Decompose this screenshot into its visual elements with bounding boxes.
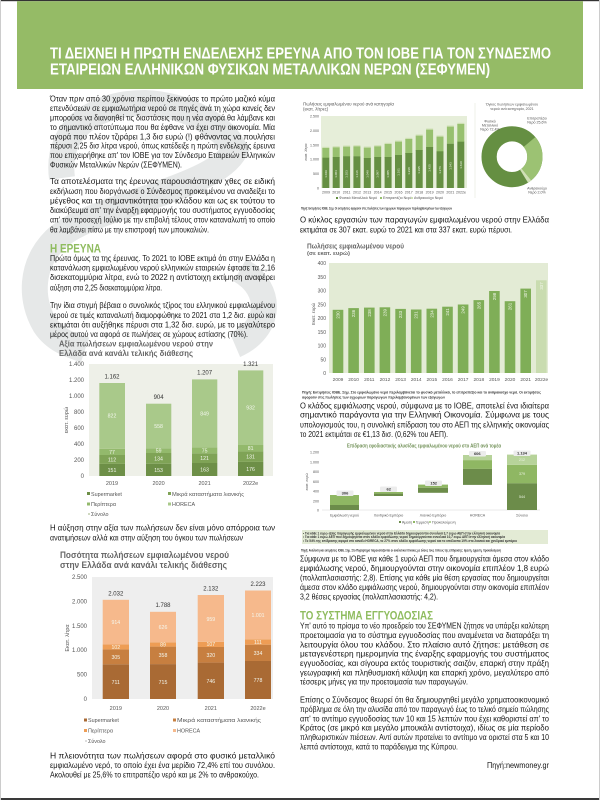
chart title: sales by category: Πωλήσεις εμφιαλωμένου νερού ανά κατηγορία — [303, 102, 394, 106]
intro paragraph: επενδύσεων σε εμφιαλωτήρια νερού σε πηγές ανά τη χώρα κανείς δεν — [50, 103, 275, 113]
legend: sales value: Supermarket — [91, 492, 122, 498]
stacked bar chart: sales value by channel: 121 — [200, 456, 209, 462]
stacked bar chart: sales value by channel: 1.162 — [104, 374, 120, 380]
second paragraph: διακύβευμα απ' την έναρξη εφαρμογής του συστήματος εγγυοδοσίας — [50, 205, 275, 215]
legend: sales volume: Μικρά καταστήματα λιανικής — [177, 717, 261, 724]
bar chart: producers sales 2009-2022: 2016 — [442, 377, 453, 383]
intro paragraph — [49, 94, 275, 170]
heading: Η ΕΡΕΥΝΑ: Η ΕΡΕΥΝΑ — [50, 242, 101, 256]
legend: sales by category: Φυσικό Μεταλλικό Νερό — [339, 196, 377, 200]
legend: sales value: HORECA — [172, 502, 195, 508]
turnover paragraph: Την ίδια στιγμή βέβαια ο συνολικός τζίρος του ελληνικού εμφιαλωμένου — [50, 300, 275, 310]
text: multipliers — [300, 554, 549, 602]
stacked bar chart: sales by category 2009-2022: 1.000 — [310, 158, 319, 162]
bar chart: producers sales 2009-2022: 231 — [414, 311, 419, 319]
donut chart: share by category 2021: Επιτραπέζιο — [527, 116, 547, 120]
stacked bar chart: sales value by channel — [63, 362, 273, 518]
bar chart: producers sales 2009-2022: 2018 — [473, 377, 484, 383]
turnover paragraph: μέρος αυτού να αφορά σε πωλήσεις σε χώρους εστίασης (70%). — [50, 329, 248, 339]
stacked bar chart: sales volume by channel: 111 — [254, 640, 262, 646]
research paragraph — [50, 253, 275, 292]
stacked bar chart: sales volume by channel: 2.132 — [203, 586, 219, 592]
waterfall chart: GDP impact by sector — [305, 444, 540, 524]
stacked bar chart: sales volume by channel: 107 — [206, 642, 215, 648]
text: multipliers: 3,2 θέσεις εργασίας (πολλαπλασιαστής: 4,2). — [300, 592, 438, 602]
legend: sales value: Σύνολο — [91, 512, 108, 518]
stacked bar chart: sales by category 2009-2022: 1.087 — [376, 170, 380, 178]
donut chart: share by category 2021: Φυσικό — [484, 120, 496, 124]
stacked bar chart: sales volume by channel: 1.500 — [72, 624, 88, 630]
source note: sales by category: Πηγή: Εκτιμήσεις ΙΟΒΕ. Σημ. Οι εκτιμήσεις αφορούν στις πωλήσεις των εγχώριων παραγωγών περιλαμβανομένων των εξαγωγών — [301, 206, 452, 210]
stacked bar chart: sales value by channel: 2022e — [243, 481, 258, 487]
donut chart: share by category 2021: Ανθρακούχο — [527, 186, 547, 190]
waterfall chart: GDP impact by sector: 212 — [519, 458, 525, 462]
legend: sales value: Περίπτερα — [91, 502, 116, 508]
waterfall chart: GDP impact by sector: 600 — [313, 480, 319, 484]
waterfall chart: GDP impact by sector: Επίδραση εφοδιαστικής αλυσίδας εμφιαλωμένου νερού στο ΑΕΠ ανά τομέα — [347, 444, 502, 450]
chart title: producers sales — [307, 242, 404, 257]
stacked bar chart: sales by category 2009-2022: 2022e — [456, 190, 466, 194]
text: financial problem: πρόβλημα σε όλη την αλυσίδα από τον παραγωγό έως το τελικό σημείο πώλησης — [300, 704, 549, 714]
stacked bar chart: sales volume by channel: 1.788 — [155, 603, 171, 609]
stacked bar chart: sales volume by channel: 746 — [206, 679, 215, 685]
bar chart: producers sales 2009-2022: 2021 — [520, 377, 531, 383]
stacked bar chart: sales by category 2009-2022 — [304, 114, 467, 200]
stacked bar chart: sales volume by channel: 2.032 — [108, 592, 124, 598]
stacked bar chart: sales value by channel: 932 — [246, 406, 255, 412]
turnover paragraph — [50, 300, 275, 339]
stacked bar chart: sales volume by channel: 334 — [254, 651, 262, 657]
header banner with title: ΕΤΑΙΡΕΙΩΝ ΕΛΛΗΝΙΚΩΝ ΦΥΣΙΚΩΝ ΜΕΤΑΛΛΙΚΩΝ ΝΕΡΩΝ (ΣΕΦΥΜΕΝ) — [50, 62, 490, 78]
stacked bar chart: sales by category 2009-2022: 1.116 — [355, 170, 359, 178]
text: bottling sector importance — [300, 400, 549, 439]
source note: GDP impact: Πηγή: Ανάλυση και εκτιμήσεις ΙΟΒΕ. Σημ. Στο Παράρτημα παρουσιάζονται οι αναλυτικοί πίνακες με όλους τους τύπους της επίδρασης: άμεση, έμμεση, προκαλούμενη — [301, 548, 501, 552]
donut chart: share by category 2021: Νερό 72,4% — [480, 128, 501, 132]
text: bottling sector importance: σημαντικό παράγοντα για την Ελληνική Οικονομία. Σύμφωνα με τους — [300, 410, 549, 420]
stacked bar chart: sales value by channel: 1.207 — [197, 370, 213, 376]
text: multipliers: άμεσα στον κλάδο εμφιάλωσης νερού, δημιουργούνται στην οικονομία επιπλέον — [300, 582, 549, 592]
stacked bar chart: sales by category 2009-2022: 2013 — [363, 190, 371, 194]
waterfall chart: GDP impact by sector: 1.200 — [310, 450, 319, 454]
research paragraph: αύξηση στα 2,25 δισεκατομμύρια λίτρα. — [50, 282, 162, 292]
legend: sales by category — [336, 196, 443, 200]
text: deposit system: εγγυοδοσίας, και σίγουρα εκτός τουριστικής σαιζόν, επαρκή στην πράξη — [300, 658, 549, 668]
stacked bar chart: sales value by channel: 1.400 — [69, 362, 85, 368]
stacked bar chart: sales volume by channel: 2020 — [157, 706, 169, 712]
stacked bar chart: sales value by channel: 904 — [154, 395, 164, 401]
legend: GDP impact: Έμμεση — [415, 520, 429, 524]
waterfall chart: GDP impact by sector: 1.134 — [517, 451, 528, 456]
waterfall chart: GDP impact by sector: 544 — [519, 495, 525, 499]
donut chart: share by category 2021: Μεταλλικό — [482, 124, 498, 128]
bar chart: producers sales 2009-2022: 233 — [398, 310, 403, 318]
text: bottling sector importance: υπολογισμούς του, η συνολική επίδραση του στο ΑΕΠ της ελληνικής οικονομίας — [300, 419, 549, 429]
stacked bar chart: sales volume by channel: 2.000 — [72, 599, 88, 605]
stacked bar chart: sales value by channel: 153 — [154, 468, 163, 474]
stacked bar chart: sales volume by channel: 959 — [206, 617, 215, 623]
waterfall chart: GDP impact by sector: 62 — [386, 487, 392, 492]
stacked bar chart: sales by category 2009-2022: 1.276 — [438, 166, 442, 174]
bar chart: producers sales 2009-2022: 2012 — [380, 377, 391, 383]
text: deposit system: λειτουργία όλου του κλάδου. Στο πλαίσιο αυτό ζήτησε: μετάθεση σε — [300, 640, 549, 650]
bar chart: producers sales 2009-2022: 307 — [523, 290, 528, 298]
chart title: sales value: Αξία πωλήσεων εμφιαλωμένου νερού στην — [59, 338, 213, 348]
donut chart: share by category 2021: Νερό 2,0% — [528, 190, 547, 194]
bar chart: producers sales 2009-2022: 2017 — [458, 377, 469, 383]
waterfall chart: GDP impact by sector: 152 — [430, 481, 438, 486]
bar chart: producers sales 2009-2022: 400 — [318, 261, 326, 267]
bar chart: producers sales 2009-2022: 337 — [539, 282, 544, 290]
intro paragraph: αγορά που πλέον τζιράρει 1,3 δισ ευρώ (!) φθάνοντας να πουλήσει — [50, 131, 275, 141]
text: multipliers: εμφιάλωσης νερού, δημιουργούνται στην οικονομία επιπλέον 1,8 ευρώ — [300, 563, 549, 573]
turnover paragraph: νερού σε τιμές καταναλωτή διαμορφώθηκε το 2021 στα 1,2 δισ. ευρώ και — [50, 310, 275, 320]
donut chart: share by category 2021: νερού ανά κατηγορία, 2021 — [490, 107, 534, 111]
stacked bar chart: sales value by channel: 600 — [74, 426, 85, 432]
legend: sales volume: HORECA — [177, 728, 200, 734]
legend: sales value — [87, 491, 244, 518]
stacked bar chart: sales volume by channel: 500 — [77, 673, 88, 679]
bar chart: producers sales 2009-2022: 236 — [351, 309, 356, 317]
stacked bar chart: sales value by channel: 1.000 — [69, 394, 85, 400]
chart title: producers sales: (σε εκατ. ευρώ) — [307, 251, 350, 257]
stacked bar chart: sales value by channel: 77 — [109, 450, 115, 456]
intro paragraph: Όταν πριν από 30 χρόνια περίπου ξεκινούσε το πρώτο μαζικό κύμα — [49, 94, 275, 104]
donut chart: share by category 2021 — [475, 102, 548, 198]
bar chart: producers sales 2009-2022: 150 — [318, 330, 326, 336]
research paragraph: δισεκατομμύρια λίτρα, ενώ το 2022 η αντίστοιχη εκτίμηση αναφέρει — [50, 272, 275, 282]
stacked bar chart: sales by category 2009-2022: 1.610 — [459, 161, 463, 169]
text: financial problem: Επίσης ο Σύνδεσμος θεωρεί ότι θα δημιουργηθεί μεγάλο χρηματοοικονομικό — [300, 694, 549, 704]
bar chart: producers sales 2009-2022: 0 — [323, 371, 326, 377]
stacked bar chart: sales by category 2009-2022: 2017 — [405, 190, 413, 194]
stacked bar chart: sales value by channel: 176 — [246, 467, 255, 473]
text: financial problem: απ' το αντίτιμο εγγυοδοσίας των 10 και 15 λεπτών που έχει καθοριστεί απ' το — [300, 714, 549, 724]
stacked bar chart: sales by category 2009-2022: 2011 — [343, 190, 350, 194]
bar chart: producers sales 2009-2022: 2010 — [348, 377, 359, 383]
legend: GDP impact: Προκαλούμενη — [432, 520, 456, 524]
stacked bar chart: sales volume by channel: 320 — [206, 653, 215, 659]
text: producers turnover: εκτιμάται σε 307 εκατ. ευρώ το 2021 και στα 337 εκατ. ευρώ πέρυσι. — [300, 224, 512, 234]
bar chart: producers sales 2009-2022: 100 — [318, 344, 326, 350]
waterfall chart: GDP impact by sector: 800 — [313, 470, 319, 474]
chart title: sales by category — [303, 102, 394, 112]
text: deposit system — [300, 620, 549, 687]
text: financial problem — [300, 694, 549, 752]
text: deposit system: μεταγενέστερη ημερομηνία της έναρξης εφαρμογής του συστήματος — [300, 648, 549, 658]
text: multipliers: (πολλαπλασιαστής: 2,8). Επίσης για κάθε μία θέση εργασίας που δημιουργείται — [300, 572, 549, 582]
stacked bar chart: sales by category 2009-2022: 2.000 — [310, 129, 319, 133]
text: financial problem: πληθωριστικών πιέσεων. Αντί αυτών προτείνει το αντίτιμο να οριστεί στα 5 και 10 — [300, 732, 549, 742]
bar chart: producers sales 2009-2022: 300 — [318, 288, 326, 294]
chart title: sales value: Ελλάδα ανά κανάλι τελικής διάθεσης — [59, 348, 193, 358]
stacked bar chart: sales by category 2009-2022: 1.103 — [345, 170, 349, 178]
chart title: sales by category: (εκατ. λίτρες) — [303, 106, 329, 112]
stacked bar chart: sales value by channel: 800 — [74, 410, 85, 416]
waterfall chart: GDP impact by sector: 606 — [474, 451, 481, 456]
waterfall chart: GDP impact by sector: 379 — [519, 472, 525, 476]
stacked bar chart: sales by category 2009-2022: 2019 — [426, 190, 434, 194]
bar chart: producers sales 2009-2022: 298 — [492, 292, 497, 300]
stacked bar chart: sales value by channel: 849 — [200, 412, 209, 418]
legend: sales by category: Επιτραπέζιο Νερό — [383, 196, 412, 200]
stacked bar chart: sales value by channel: 131 — [246, 454, 255, 460]
waterfall chart: GDP impact by sector: εκατ. ευρώ — [305, 473, 309, 490]
waterfall chart: GDP impact by sector: 200 — [313, 499, 319, 503]
bar chart: producers sales 2009-2022: 265 — [476, 301, 481, 309]
text: multipliers: Σύμφωνα με το ΙΟΒΕ για κάθε 1 ευρώ ΑΕΠ που δημιουργείται άμεσα στον κλάδο — [300, 554, 549, 564]
stacked bar chart: sales by category 2009-2022: 1.500 — [310, 143, 319, 147]
stacked bar chart: sales by category 2009-2022: εκατ. λίτρα — [304, 144, 308, 160]
stacked bar chart: sales volume by channel: 914 — [111, 620, 120, 626]
stacked bar chart: sales by category 2009-2022: 2010 — [332, 190, 340, 194]
text: deposit system: τέσσερις μήνες για την προετοιμασία των παραγωγών. — [300, 677, 468, 687]
stacked bar chart: sales value by channel: 134 — [154, 456, 163, 462]
header banner with title — [17, 1, 583, 89]
intro paragraph: το σημαντικό αποτύπωμα που θα έφθανε να έχει στην οικονομία. Μία — [50, 122, 275, 132]
stacked bar chart: sales by category 2009-2022: 1.543 — [448, 162, 452, 170]
bar chart: producers sales 2009-2022: Εκατ. ευρώ — [311, 302, 316, 325]
stacked bar chart: sales volume by channel: 89 — [160, 642, 166, 648]
bar chart: producers sales 2009-2022: 249 — [461, 306, 466, 314]
stacked bar chart: sales value by channel: 400 — [74, 442, 85, 448]
stacked bar chart: sales volume by channel: 305 — [111, 655, 120, 661]
stacked bar chart: sales value by channel: 81 — [248, 446, 254, 452]
stacked bar chart: sales by category 2009-2022: 2.500 — [310, 114, 319, 118]
waterfall chart: GDP impact by sector: 306 — [342, 491, 349, 496]
stacked bar chart: sales by category 2009-2022: 1.049 — [365, 170, 369, 178]
second paragraph: Τα αποτελέσματα της έρευνας παρουσιάστηκαν χθες σε ειδική — [50, 176, 275, 186]
legend: sales volume: Supermarket — [88, 718, 119, 724]
stacked bar chart: sales volume by channel: 358 — [159, 653, 167, 659]
stacked bar chart: sales value by channel: 200 — [74, 458, 85, 464]
stacked bar chart: sales volume by channel: 778 — [254, 678, 262, 684]
bar chart: producers sales 2009-2022: 2015 — [426, 377, 437, 383]
heading: ΤΟ ΣΥΣΤΗΜΑ ΕΓΓΥΟΔΟΣΙΑΣ: ΤΟ ΣΥΣΤΗΜΑ ΕΓΓΥΟΔΟΣΙΑΣ — [300, 608, 433, 622]
bar chart: producers sales 2009-2022: 50 — [320, 357, 326, 363]
legend: GDP impact — [399, 520, 456, 524]
source note: producers sales — [302, 390, 541, 399]
intro paragraph: Φυσικών Μεταλλικών Νερών (ΣΕΦΥΜΕΝ). — [50, 160, 182, 170]
waterfall chart: GDP impact by sector: Χονδρικό Εμπόριο — [374, 514, 403, 518]
source note: producers sales: Πηγή: Εκτιμήσεις ΙΟΒΕ. Σημ. Στο εμφιαλωμένο νερό περιλαμβάνεται το φυσικό μεταλλικό, το επιτραπέζιο και το ανθρακούχο νερό. Οι εκτιμήσεις — [302, 390, 541, 394]
stacked bar chart: sales volume by channel: 2.500 — [72, 575, 88, 581]
callout box: multipliers: • Για κάθε 1 ευρώ ΑΕΠ που δημιουργείται στον κλάδο εμφιάλωσης νερού δημιουργούνται συνολικά 10,7 ευρώ ΑΕΠ στην ελληνική οικονομία — [303, 535, 506, 539]
stacked bar chart: sales value by channel: 59 — [156, 448, 162, 454]
text: financial problem: λεπτά αντίστοιχα, κατά το παράδειγμα της Κύπρου. — [300, 742, 458, 752]
waterfall chart: GDP impact by sector: 400 — [313, 490, 319, 494]
chart title: sales value — [59, 338, 213, 358]
second paragraph: εκδήλωση που διοργάνωσε ο Σύνδεσμος προκειμένου να αναδείξει το — [50, 186, 275, 196]
stacked bar chart: sales by category 2009-2022: 1.084 — [334, 170, 338, 178]
bar chart: producers sales 2009-2022: 2009 — [333, 377, 344, 383]
stacked bar chart: sales volume by channel: 1.001 — [252, 613, 265, 619]
callout box: multipliers: • Για κάθε 1 ευρώ αξίας παραγωγής εμφιαλωμένου νερού στην Ελλάδα δημιουργούνται συνολικά 3,7 ευρώ ΑΕΠ στην ελληνική οικονομία — [303, 531, 501, 535]
legend: sales volume — [84, 717, 261, 745]
callout box: multipliers: • Το 54% της επίδρασης αφορά στο κανάλι HORECA, το 27% στον κλάδο εμφιάλωσης νερού και το υπόλοιπο 19% στο λιανικό και χονδρικό εμπόριο — [303, 539, 517, 543]
bar chart: producers sales 2009-2022: 2013 — [395, 377, 406, 383]
text: producers turnover — [300, 214, 549, 234]
stacked bar chart: sales by category 2009-2022: 2014 — [374, 190, 382, 194]
stacked bar chart: sales by category 2009-2022: 1.085 — [386, 170, 390, 178]
waterfall chart: GDP impact by sector: Σύνολο — [516, 514, 528, 518]
stacked bar chart: sales value by channel: 1.200 — [69, 378, 85, 384]
text: water type shares: Η πλειονότητα των πωλήσεων αφορά στο φυσικό μεταλλικό — [50, 750, 275, 760]
bar chart: producers sales 2009-2022: 2019 — [489, 377, 500, 383]
stacked bar chart: sales volume by channel: 2019 — [110, 706, 122, 712]
stacked bar chart: sales value by channel: 2020 — [152, 481, 165, 487]
legend: sales value: Μικρά καταστήματα λιανικής — [172, 491, 244, 498]
intro paragraph: πέρυσι 2,25 δισ λίτρα νερού, όπως κατέδειξε η πρώτη ενδελεχής έρευνα — [50, 141, 275, 151]
bar chart: producers sales 2009-2022: 2011 — [364, 377, 375, 383]
stacked bar chart: sales value by channel: 2019 — [106, 481, 118, 487]
chart title: producers sales: Πωλήσεις εμφιαλωμένου νερού — [307, 242, 404, 250]
stacked bar chart: sales by category 2009-2022: 2016 — [394, 190, 402, 194]
stacked bar chart: sales by category 2009-2022: 1.335 — [417, 166, 421, 174]
stacked bar chart: sales volume by channel — [65, 575, 273, 745]
intro paragraph: που επιχειρήθηκε απ' τον ΙΟΒΕ για τον Σύνδεσμο Εταιρειών Ελληνικών — [50, 150, 275, 160]
donut chart: share by category 2021: Όγκος πωλήσεων εμφιαλωμένου — [485, 102, 538, 106]
stacked bar chart: sales volume by channel: 102 — [111, 645, 120, 651]
stacked bar chart: sales volume by channel: 2022e — [250, 706, 266, 712]
bar chart: producers sales 2009-2022: 230 — [336, 311, 340, 319]
bar chart: producers sales 2009-2022: 2022e — [535, 377, 548, 383]
stacked bar chart: sales by category 2009-2022: 500 — [313, 172, 319, 176]
text: value growth note: Η αύξηση στην αξία των πωλήσεων δεν είναι μόνο απόρροια των — [50, 522, 275, 532]
stacked bar chart: sales by category 2009-2022: 1.049 — [324, 170, 328, 178]
stacked bar chart: sales volume by channel: 2.223 — [250, 582, 266, 588]
stacked bar chart: sales value by channel: 822 — [108, 414, 116, 420]
research paragraph: Πρώτα όμως τα της έρευνας. Το 2021 το ΙΟΒΕ εκτιμά ότι στην Ελλάδα η — [50, 253, 275, 263]
waterfall chart: GDP impact by sector: Λιανικό Εμπόριο — [420, 514, 446, 518]
donut chart: share by category 2021: Νερό 25,6% — [527, 120, 548, 124]
bar chart: producers sales 2009-2022: 2020 — [505, 377, 516, 383]
stacked bar chart: sales by category 2009-2022: 2015 — [384, 190, 392, 194]
waterfall chart: GDP impact by sector: HORECA — [470, 514, 486, 518]
legend: sales by category: Ανθρακούχο Νερό — [414, 196, 443, 200]
bar chart: producers sales 2009-2022: 350 — [318, 275, 326, 281]
bar chart: producers sales 2009-2022: 239 — [382, 308, 387, 316]
waterfall chart: GDP impact by sector: Εμφιάλωση νερού — [330, 514, 359, 518]
stacked bar chart: sales volume by channel: 711 — [112, 680, 120, 686]
stacked bar chart: sales value by channel: 75 — [202, 448, 208, 454]
source note: producers sales: αφορούν στις πωλήσεις των εγχώριων παραγωγών περιλαμβανομένων των εξαγωγών — [302, 395, 445, 399]
bar chart: producers sales 2009-2022: 261 — [508, 302, 512, 310]
stacked bar chart: sales value by channel: 151 — [108, 468, 116, 474]
source credit: Πηγή:newmoney.gr — [487, 760, 549, 770]
stacked bar chart: sales value by channel: εκατ. ευρώ — [63, 406, 70, 433]
bar chart: producers sales 2009-2022: 200 — [318, 316, 326, 322]
stacked bar chart: sales by category 2009-2022: 2012 — [353, 190, 361, 194]
text: water type shares: εμφιαλωμένο νερό, το οποίο έχει ένα μερίδιο 72,4% επί του συνόλου. — [50, 760, 275, 770]
chart title: sales volume: Ποσότητα πωλήσεων εμφιαλωμένου νερού — [60, 550, 229, 560]
chart title: sales volume — [60, 550, 229, 570]
bar chart: producers sales 2009-2022: 241 — [445, 308, 450, 316]
legend: sales volume: Σύνολο — [88, 739, 105, 745]
bar chart: producers sales 2009-2022: 2014 — [411, 377, 422, 383]
second paragraph — [50, 176, 275, 234]
stacked bar chart: sales volume by channel: Εκατ. λίτρα — [65, 624, 71, 652]
text: water type shares — [50, 750, 275, 780]
waterfall chart: GDP impact by sector: 0 — [317, 508, 319, 512]
second paragraph: απ' τον προσεχή Ιούλιο με την επιβολή τέλους στον καταναλωτή το οποίο — [50, 214, 275, 224]
callout box: multipliers — [302, 530, 548, 544]
stacked bar chart: sales by category 2009-2022: 0 — [317, 186, 319, 190]
legend: sales volume: Περίπτερα — [88, 728, 113, 734]
bar chart: producers sales 2009-2022: 234 — [429, 310, 434, 318]
bar chart: producers sales 2009-2022 — [311, 261, 548, 383]
text: value growth note: ανατιμήσεων αλλά και στην αύξηση του όγκου των πωλήσεων — [50, 532, 243, 542]
text: deposit system: Υπ' αυτό το πρίσμα το νέο προεδρείο του ΣΕΦΥΜΕΝ ζήτησε να υπάρξει καλύτερη — [300, 620, 549, 630]
turnover paragraph: εκτιμάται ότι αυξήθηκε πέρυσι στα 1,32 δισ. ευρώ, με το μεγαλύτερο — [50, 319, 275, 329]
stacked bar chart: sales value by channel: 558 — [154, 424, 163, 430]
legend: GDP impact: Άμεση — [402, 520, 412, 524]
bar chart: producers sales 2009-2022: 250 — [318, 302, 326, 308]
text: producers turnover: Ο κύκλος εργασιών των παραγωγών εμφιαλωμένου νερού στην Ελλάδα — [300, 214, 549, 224]
stacked bar chart: sales by category 2009-2022: 1.425 — [428, 164, 432, 172]
stacked bar chart: sales by category 2009-2022: 2018 — [415, 190, 423, 194]
text: bottling sector importance: Ο κλάδος εμφιάλωσης νερού, σύμφωνα με το ΙΟΒΕ, αποτελεί ένα ιδιαίτερα — [300, 400, 549, 410]
stacked bar chart: sales by category 2009-2022: 2021 — [446, 190, 454, 194]
stacked bar chart: sales by category 2009-2022: 1.161 — [396, 168, 400, 176]
stacked bar chart: sales volume by channel: 2021 — [205, 706, 217, 712]
stacked bar chart: sales value by channel: 163 — [200, 468, 209, 474]
second paragraph: θα λαμβάνει πίσω με την επιστροφή των μπουκαλιών. — [50, 224, 209, 234]
text: financial problem: Κράτος (σε μικρό και μεγάλο μπουκάλι αντίστοιχα), ιδίως σε μία περίοδο — [300, 722, 549, 732]
stacked bar chart: sales volume by channel: 626 — [159, 625, 167, 631]
stacked bar chart: sales by category 2009-2022: 1.238 — [407, 167, 411, 175]
stacked bar chart: sales by category 2009-2022: 2020 — [436, 190, 444, 194]
intro paragraph: μπορούσε να διανοηθεί τις διαστάσεις που η νέα αγορά θα λάμβανε και — [50, 112, 275, 122]
stacked bar chart: sales value by channel: 2021 — [198, 481, 211, 487]
stacked bar chart: sales value by channel: 112 — [108, 458, 116, 464]
bar chart: producers sales 2009-2022: 238 — [367, 309, 372, 317]
stacked bar chart: sales volume by channel: 0 — [84, 697, 88, 703]
text: bottling sector importance: το 2021 εκτιμάται σε €1,13 δισ. (0,62% του ΑΕΠ). — [300, 429, 448, 439]
text: deposit system: προετοιμασία για το σύστημα εγγυοδοσίας που αναμένεται να διαταράξει τη — [300, 630, 549, 640]
stacked bar chart: sales value by channel: 1.321 — [243, 362, 259, 368]
research paragraph: κατανάλωση εμφιαλωμένου νερού ελληνικών εταιρειών έφτασε τα 2,16 — [50, 262, 275, 272]
text: value growth note — [50, 522, 275, 542]
stacked bar chart: sales value by channel: 0 — [81, 474, 85, 480]
stacked bar chart: sales volume by channel: 715 — [159, 680, 167, 686]
text: deposit system: γεωγραφική και πληθυσμιακή κάλυψη και επαρκή χρόνο, μεγαλύτερο από — [300, 668, 549, 678]
waterfall chart: GDP impact by sector: 1.000 — [310, 460, 319, 464]
stacked bar chart: sales by category 2009-2022: 2009 — [322, 190, 330, 194]
stacked bar chart: sales volume by channel: 1.000 — [72, 648, 88, 654]
chart title: sales volume: στην Ελλάδα ανά κανάλι τελικής διάθεσης — [60, 560, 227, 570]
second paragraph: μέγεθος και τη σημαντικότητα του κλάδου και ως εκ τούτου το — [50, 196, 275, 206]
text: water type shares: Ακολουθεί με 25,6% το επιτραπέζιο νερό και με 2% το ανθρακούχο. — [50, 770, 259, 780]
